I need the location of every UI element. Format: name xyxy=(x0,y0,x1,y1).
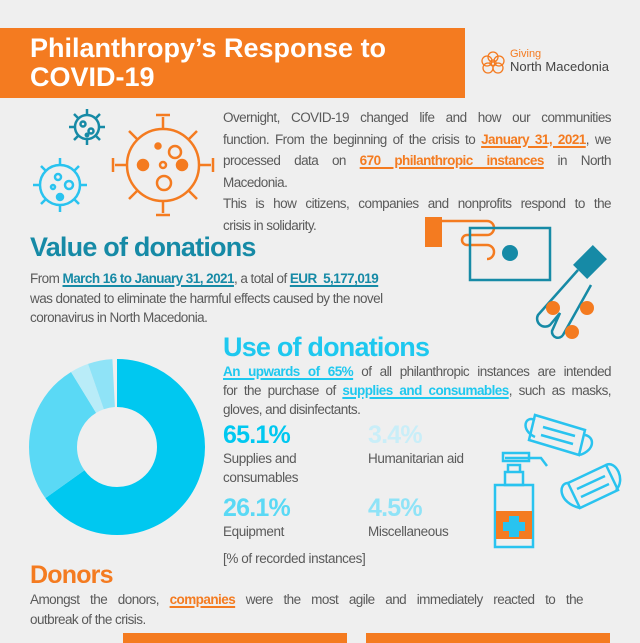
logo: North Macedonia xyxy=(510,59,609,74)
stat: misc: Miscellaneous xyxy=(368,524,448,539)
icon: viruses xyxy=(33,109,214,216)
title banner xyxy=(0,28,465,98)
use text xyxy=(223,364,611,417)
heading: value of donations: Value of donations xyxy=(30,232,256,262)
donors text xyxy=(30,592,583,626)
value text xyxy=(30,271,383,325)
use text: gloves, and disinfectants. xyxy=(223,402,360,417)
intro text: This is how citizens, companies and nonprofits respond to the xyxy=(223,196,611,211)
stat: supplies: 65.1% xyxy=(223,421,290,449)
title xyxy=(30,33,386,92)
logo: Giving xyxy=(510,48,541,60)
icon: masks and sanitizer xyxy=(494,413,622,548)
orange boxes xyxy=(123,633,347,643)
title: COVID-19 xyxy=(30,62,155,92)
stat: supplies: consumables xyxy=(223,470,298,485)
stat: humanitarian: 3.4% xyxy=(368,421,422,449)
icon: hand with money xyxy=(425,217,607,339)
stat: misc: 4.5% xyxy=(368,494,422,522)
donors text: outbreak of the crisis. xyxy=(30,612,146,626)
intro text: crisis in solidarity. xyxy=(223,218,316,232)
stat: equipment xyxy=(223,494,290,539)
use text: for the purchase of supplies and consumables, such as masks, xyxy=(223,383,611,398)
heading: donors: Donors xyxy=(30,561,113,589)
intro text xyxy=(223,110,611,233)
donors text: Amongst the donors, companies were the most agile and immediately reacted to the xyxy=(30,592,583,607)
intro text: processed data on 670 philanthropic instances in North xyxy=(223,153,611,168)
stat: humanitarian: Humanitarian aid xyxy=(368,451,464,466)
intro text: Overnight, COVID-19 changed life and how our communities xyxy=(223,110,611,125)
intro text: Macedonia. xyxy=(223,174,287,190)
stat: humanitarian xyxy=(368,421,464,466)
value text: From March 16 to January 31, 2021, a total of EUR 5,177,019 xyxy=(30,271,378,286)
use text: An upwards of 65% of all philanthropic instances are intended xyxy=(223,364,611,379)
intro text: function. From the beginning of the crisis to January 31, 2021, we xyxy=(223,132,611,146)
value text: was donated to eliminate the harmful effects caused by the novel xyxy=(30,290,383,306)
stat: supplies: Supplies and xyxy=(223,451,296,466)
logo xyxy=(481,48,609,74)
note: [% of recorded instances] xyxy=(223,551,365,566)
donut chart xyxy=(29,359,205,535)
stat: equipment: 26.1% xyxy=(223,494,290,522)
title: Philanthropy’s Response to xyxy=(30,33,386,63)
stat: supplies xyxy=(223,421,298,485)
stat: misc xyxy=(368,494,448,539)
stat: equipment: Equipment xyxy=(223,524,284,539)
heading: use of donations: Use of donations xyxy=(223,332,429,362)
value text: coronavirus in North Macedonia. xyxy=(30,310,207,325)
